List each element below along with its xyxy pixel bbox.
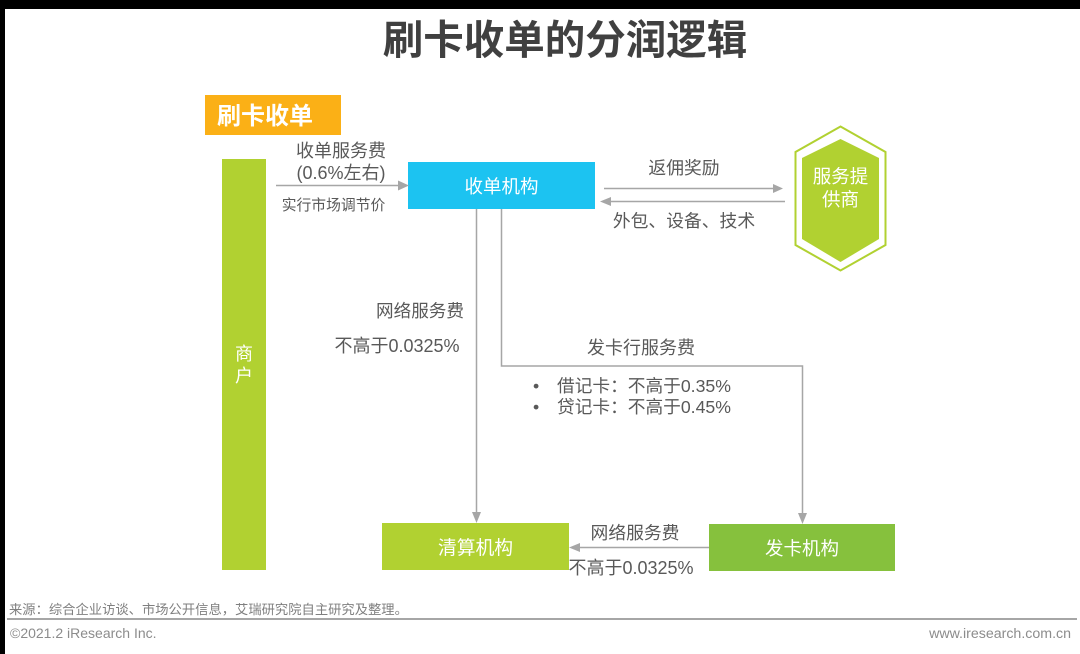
panel: 收单机构: 收单机构 <box>464 176 538 196</box>
arrow: acquirer to issuer <box>502 209 807 524</box>
panel: 发卡机构: 发卡机构 <box>765 538 839 558</box>
list: issuer fee rates: • <box>533 397 539 417</box>
title: 刷卡收单的分润逻辑 <box>383 17 747 63</box>
arrow: outsourcing back to acquirer <box>600 197 785 206</box>
section tag: 刷卡收单 <box>205 95 341 135</box>
label: outsourcing: 外包、设备、技术 <box>613 211 755 231</box>
panel: 商户 <box>222 159 266 570</box>
label: network fee rate bottom: 不高于0.0325% <box>568 558 694 578</box>
label: acquiring service fee: 收单服务费 <box>296 141 386 161</box>
arrow: issuer to clearing <box>569 543 709 552</box>
source note: 来源：综合企业访谈、市场公开信息，艾瑞研究院自主研究及整理。 <box>9 602 408 617</box>
label: issuer fee: 发卡行服务费 <box>587 338 695 358</box>
label: rebate: 返佣奖励 <box>648 158 720 178</box>
label: network fee bottom: 网络服务费 <box>591 523 679 543</box>
arrow: acquirer to clearing <box>472 209 481 523</box>
panel: 发卡机构 <box>709 524 895 571</box>
list: issuer fee rates: 贷记卡：不高于0.45% <box>557 397 731 417</box>
arrow: merchant to acquirer <box>276 180 409 190</box>
label: network fee rate: 不高于0.0325% <box>334 336 460 356</box>
label: network fee: 网络服务费 <box>376 301 464 321</box>
arrow: rebate to service provider <box>604 184 783 193</box>
icon: service provider hexagon <box>796 126 886 270</box>
hexagon label <box>813 166 868 210</box>
hexagon label: 服务提 <box>813 166 868 187</box>
list: issuer fee rates: • <box>533 376 539 396</box>
footer rule <box>7 618 1077 620</box>
panel: 收单机构 <box>408 162 595 209</box>
panel: 清算机构 <box>382 523 569 570</box>
copyright: ©2021.2 iResearch Inc. <box>10 625 157 641</box>
list: issuer fee rates <box>533 376 731 417</box>
list: issuer fee rates: 借记卡：不高于0.35% <box>557 376 731 396</box>
section tag: 刷卡收单: 刷卡收单 <box>217 102 313 130</box>
label: acquiring service fee: (0.6%左右) <box>296 163 386 183</box>
panel: 清算机构: 清算机构 <box>438 537 513 558</box>
label: market price: 实行市场调节价 <box>282 198 385 214</box>
black top edge <box>0 0 1080 9</box>
hexagon label: 供商 <box>822 189 859 210</box>
black left edge <box>0 0 5 654</box>
panel: 商户: 商 <box>235 344 253 364</box>
website: www.iresearch.com.cn <box>929 626 1071 642</box>
label: acquiring service fee <box>296 141 386 183</box>
panel: 商户: 户 <box>235 366 253 386</box>
